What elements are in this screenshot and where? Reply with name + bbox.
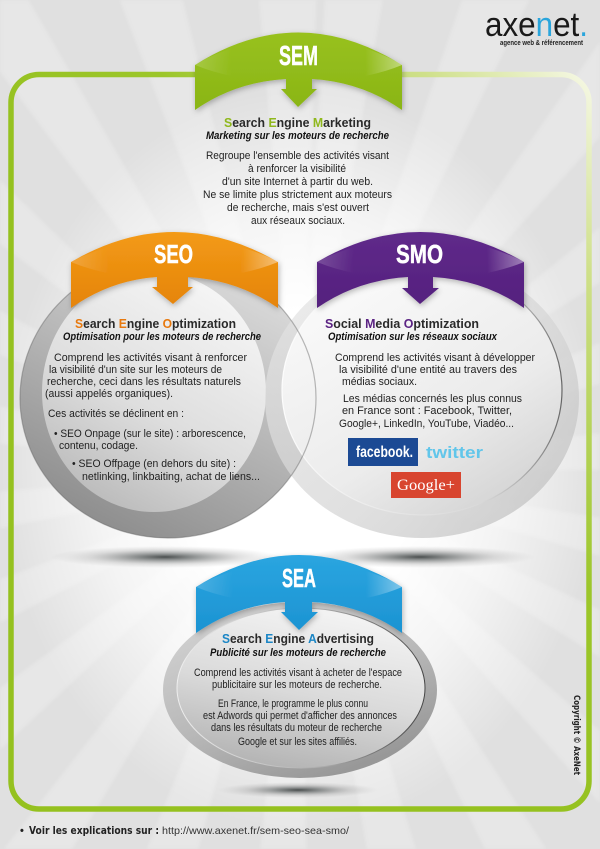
SEA description: dans les résultats du moteur de recherche <box>211 722 382 734</box>
panel: SEM <box>195 32 402 227</box>
SMO ring <box>265 258 579 538</box>
SMO title: Social Media Optimization <box>325 316 479 331</box>
icon: facebook logo: facebook. <box>356 444 413 461</box>
SEO description: • SEO Onpage (sur le site) : arborescence, <box>54 428 246 440</box>
SEA ribbon with arrow: SEA <box>282 563 316 593</box>
shadow under SEO <box>50 546 280 568</box>
SMO description: en France sont : Facebook, Twitter, <box>342 405 512 417</box>
SEA ring <box>163 602 437 778</box>
SMO subtitle: Optimisation sur les réseaux sociaux <box>328 331 498 343</box>
SEA description: est Adwords qui permet d'afficher des annonces <box>203 710 398 722</box>
icon: Google+ logo <box>391 472 461 498</box>
SEA description: Comprend les activités visant à acheter de l'espace <box>194 667 402 679</box>
SEO description: • SEO Offpage (en dehors du site) : <box>72 458 236 470</box>
SEM description: Regroupe l'ensemble des activités visant <box>206 150 389 162</box>
SEO outer edge across overlap <box>20 258 316 538</box>
SEA description: En France, le programme le plus connu <box>218 698 368 710</box>
SEO description: netlinking, linkbaiting, achat de liens... <box>82 471 260 483</box>
logo: axenet: axenet. <box>485 6 588 44</box>
panel: SEA <box>163 555 437 778</box>
SEO text block <box>45 316 261 483</box>
SEA description <box>194 667 402 748</box>
SEO subtitle: Optimisation pour les moteurs de recherche <box>63 331 261 343</box>
SEM description <box>203 150 393 227</box>
SMO description: Comprend les activités visant à développer <box>335 352 535 364</box>
SEO ribbon with arrow: SEO <box>154 239 193 269</box>
SEM description: d'un site Internet à partir du web. <box>222 176 373 188</box>
SMO description: Google+, LinkedIn, YouTube, Viadéo... <box>339 418 514 430</box>
shadow under SMO <box>305 546 535 568</box>
icon: facebook logo <box>348 438 418 466</box>
footer link line: http://www.axenet.fr/sem-seo-sea-smo/ <box>162 825 349 837</box>
SEM subtitle: Marketing sur les moteurs de recherche <box>206 130 389 142</box>
icon: twitter logo: twitter <box>426 443 483 462</box>
SEO description: (aussi appelés organiques). <box>45 388 173 400</box>
SEM description: aux réseaux sociaux. <box>251 215 345 227</box>
SEO inner disc <box>42 272 266 512</box>
SMO description: la visibilité d'une entité au travers des <box>339 364 518 376</box>
SMO description: médias sociaux. <box>342 376 417 388</box>
SEA ribbon with arrow <box>196 555 402 633</box>
SEM ribbon with arrow: SEM <box>279 40 318 71</box>
SEA description: Google et sur les sites affiliés. <box>238 736 357 748</box>
SEO description: contenu, codage. <box>59 440 138 452</box>
shadow under SEA <box>218 782 378 798</box>
SEA subtitle: Publicité sur les moteurs de recherche <box>210 647 386 659</box>
copyright vertical text: Copyright © AxeNet <box>571 695 581 776</box>
SMO ribbon with arrow: SMO <box>396 239 443 269</box>
SEM description: à renforcer la visibilité <box>248 163 346 175</box>
icon: Google+ logo: Google+ <box>397 477 455 494</box>
SEM description: de recherche, mais s'est ouvert <box>227 202 369 214</box>
SEO ribbon with arrow <box>71 232 278 308</box>
SEA inner disc <box>177 608 425 768</box>
SMO inner disc <box>282 265 562 515</box>
SEO ring <box>20 258 316 538</box>
SEM ribbon with arrow <box>195 32 402 110</box>
SEO description: recherche, ceci dans les résultats naturels <box>47 376 242 388</box>
SEA description: publicitaire sur les moteurs de recherche. <box>212 679 382 691</box>
footer link line: • <box>20 825 24 837</box>
SMO description: Les médias concernés les plus connus <box>343 393 523 405</box>
footer link line: Voir les explications sur : <box>29 825 159 837</box>
SMO ribbon with arrow <box>317 232 524 308</box>
SEO description: Ces activités se déclinent en : <box>48 408 184 420</box>
panel: SMO circle <box>265 258 579 538</box>
SEO description: la visibilité d'un site sur les moteurs de <box>49 364 222 376</box>
SMO description <box>335 352 535 430</box>
SEO description <box>45 352 260 483</box>
footer link line <box>20 825 349 837</box>
SEO description: Comprend les activités visant à renforcer <box>54 352 247 364</box>
SEM title: Search Engine Marketing <box>224 115 371 130</box>
SMO text block <box>325 316 535 498</box>
panel: SEO circle <box>20 258 316 538</box>
SEA title: Search Engine Advertising <box>222 631 374 646</box>
SEO title: Search Engine Optimization <box>75 316 236 331</box>
SEM description: Ne se limite plus strictement aux moteurs <box>203 189 393 201</box>
